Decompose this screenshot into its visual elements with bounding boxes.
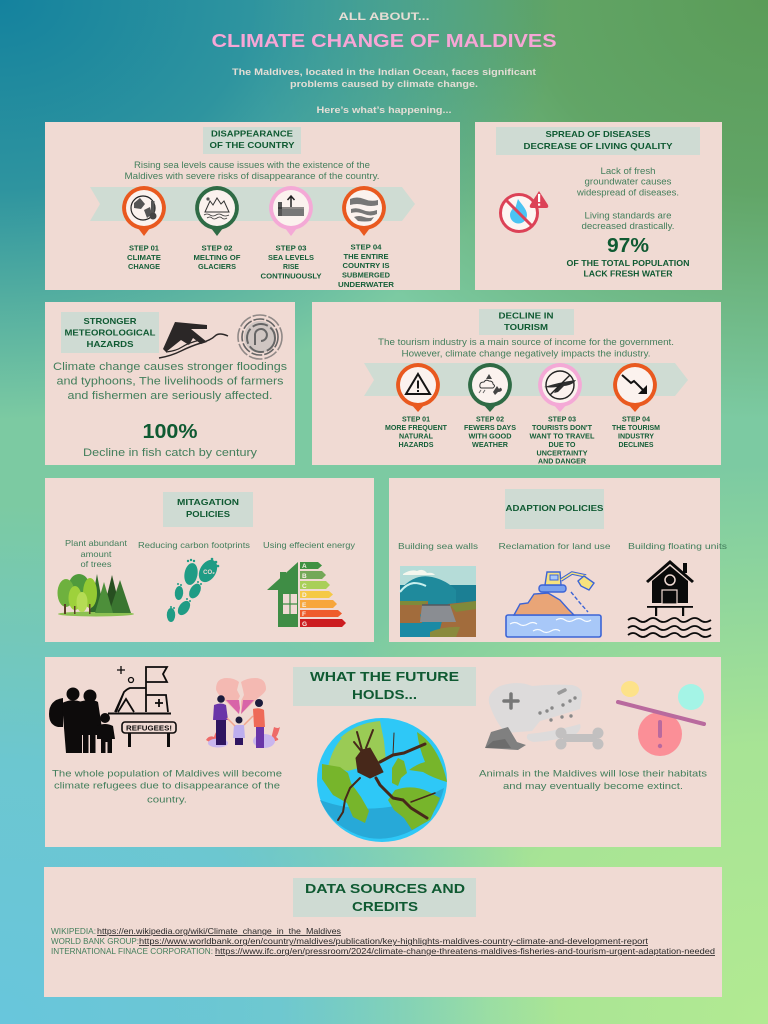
heading: mitigation <box>163 492 253 527</box>
step 04 label: UNDERWATER <box>338 282 394 289</box>
heading: tourism: TOURISM <box>504 322 548 332</box>
step 03 pin: no flights <box>538 363 582 412</box>
heading: data sources: CREDITS <box>352 899 418 914</box>
step 04 label: COUNTRY IS <box>342 263 390 270</box>
step 01 label <box>127 246 161 271</box>
heading: disappearance: OF THE COUNTRY <box>210 140 295 150</box>
arrow band <box>90 187 415 221</box>
icon: family with broken heart <box>206 678 280 748</box>
heading: hazards: STRONGER <box>84 316 136 326</box>
source line: ifc: https://www.ifc.org/en/pressroom/2024/climate-change-threatens-maldives-fisheries-and-tourism-urgent-adaptation-needed <box>215 946 715 956</box>
body text <box>124 160 380 181</box>
step 03 label: UNCERTAINTY <box>536 450 588 458</box>
heading: what the future holds: HOLDS... <box>352 687 417 702</box>
caption: carbon footprints: Reducing carbon footprints <box>138 540 250 550</box>
icon: trees <box>58 574 134 616</box>
step 01 label: MORE FREQUENT <box>385 425 448 432</box>
intro text <box>232 67 537 116</box>
stat caption <box>566 259 690 278</box>
step 04 label: THE ENTIRE <box>344 254 389 261</box>
icon: cracked globe <box>317 718 447 842</box>
heading: spread of diseases: DECREASE OF LIVING QUALITY <box>524 141 673 151</box>
step 03 label: DUE TO <box>548 442 576 449</box>
body text: Rising sea levels cause issues with the existence of the <box>134 160 370 170</box>
stat caption: LACK FRESH WATER <box>584 270 673 278</box>
body text: animals <box>479 768 707 792</box>
stat caption: OF THE TOTAL POPULATION <box>566 259 690 268</box>
body text: refugees: The whole population of Maldives will become <box>52 768 282 780</box>
body text: groundwater causes <box>584 176 672 186</box>
body text: However, climate change negatively impacts the industry. <box>402 348 650 358</box>
icon: energy rating house: B <box>302 573 307 580</box>
step 03 label: CONTINUOUSLY <box>260 274 322 280</box>
step 01 label: CLIMATE <box>127 255 161 262</box>
step 01 label <box>385 416 448 449</box>
step 02 pin: bad weather <box>468 363 512 412</box>
source line: wikipedia: WIKIPEDIA: <box>51 926 96 936</box>
icon: no water warning <box>500 191 548 232</box>
icon: carbon footprints <box>167 557 221 622</box>
step 03 label: STEP 03 <box>548 416 576 424</box>
heading: hazards <box>61 312 159 353</box>
step 01 pin: climate change <box>122 186 166 236</box>
step 04 label: STEP 04 <box>622 416 650 424</box>
body text: animals: Animals in the Maldives will lose their habitats <box>479 768 707 780</box>
step 02 label <box>194 246 241 271</box>
step 02 label <box>464 416 516 449</box>
step 03 label <box>260 246 322 280</box>
body text: widespread of diseases. <box>576 188 679 198</box>
icon: energy rating house: F <box>302 611 306 618</box>
icon: refugee camp and sign <box>108 666 176 747</box>
panel: stronger meteorological hazards <box>45 302 295 465</box>
panel: what the future holds <box>45 657 721 847</box>
step 04 label: DECLINES <box>618 442 654 449</box>
stat: 100%: 100% <box>142 421 198 443</box>
icon: energy rating house <box>267 562 346 628</box>
panel: mitigation policies <box>45 478 374 642</box>
body text: Maldives with severe risks of disappearance of the country. <box>124 171 380 181</box>
body text: animals: and may eventually become extinct. <box>503 781 683 792</box>
step 03 label: SEA LEVELS <box>268 255 314 262</box>
body text: decreased drastically. <box>582 221 674 231</box>
arrow band <box>364 363 688 396</box>
heading: mitigation: MITAGATION <box>177 497 239 507</box>
caption: efficient energy: Using effecient energy <box>263 540 356 550</box>
step 02 label: MELTING OF <box>194 255 241 262</box>
panel: adaption policies <box>389 478 727 642</box>
source line: ifc: INTERNATIONAL FINACE CORPORATION: <box>51 946 213 956</box>
step 04 label <box>338 244 394 289</box>
caption: plant trees: of trees <box>80 559 112 569</box>
body text: The tourism industry is a main source of income for the government. <box>378 337 674 347</box>
step 01 label: STEP 01 <box>402 416 430 424</box>
step 03 label <box>530 416 595 466</box>
body text <box>378 337 674 358</box>
source line: world bank: https://www.worldbank.org/en/country/maldives/publication/key-highlights-maldives-country-climate-and-development-report <box>139 936 649 946</box>
panel: disappearance of the country <box>45 122 460 290</box>
icon: refugee camp and sign: REFUGEES! <box>126 726 172 732</box>
panel: decline in tourism <box>312 302 721 466</box>
step 03 label: WANT TO TRAVEL <box>530 434 595 440</box>
body text: refugees: climate refugees due to disappearance of the <box>54 780 280 792</box>
icon: dinosaur skull <box>485 683 582 750</box>
step 03 label: RISE <box>283 264 299 271</box>
step 03 label: AND DANGER <box>538 458 586 466</box>
heading: data sources: DATA SOURCES AND <box>305 881 465 896</box>
source line: ifc <box>51 946 715 956</box>
body text <box>576 166 679 231</box>
body text: and typhoons, The livelihoods of farmers <box>56 376 284 388</box>
heading: data sources <box>293 878 476 917</box>
step 02 label: GLACIERS <box>198 264 236 271</box>
step 04 label: STEP 04 <box>350 244 382 252</box>
title: CLIMATE CHANGE OF MALDIVES <box>212 31 556 51</box>
panel: spread of diseases <box>475 122 722 290</box>
intro text: The Maldives, located in the Indian Ocean, faces significant <box>232 67 537 78</box>
heading: disappearance: DISAPPEARANCE <box>211 128 293 138</box>
step 02 label: STEP 02 <box>476 416 504 424</box>
icon: typhoon swirl <box>238 315 282 359</box>
step 01 label: HAZARDS <box>398 442 434 449</box>
panel: data sources and credits <box>44 867 722 997</box>
step 01 label: NATURAL <box>399 434 434 440</box>
step 01 label: CHANGE <box>128 264 160 271</box>
caption: plant trees: Plant abundant <box>65 538 128 548</box>
caption: plant trees: amount <box>80 549 112 559</box>
heading: disappearance <box>203 127 301 154</box>
icon: refugee family <box>49 688 115 753</box>
source line: world bank: WORLD BANK GROUP: <box>51 936 139 946</box>
stat caption: Decline in fish catch by century <box>83 447 258 459</box>
heading: hazards: HAZARDS <box>86 339 134 349</box>
step 01 pin: hazard warning <box>396 363 440 412</box>
intro text: problems caused by climate change. <box>290 79 478 90</box>
heading: tourism <box>479 309 574 335</box>
icon: sea wall scene <box>400 566 476 637</box>
step 03 pin: sea levels rise <box>269 186 313 236</box>
body text: Living standards are <box>584 210 672 220</box>
step 04 pin: declining arrow <box>613 363 657 412</box>
step 04 label: INDUSTRY <box>618 434 654 440</box>
step 04 label <box>612 416 660 449</box>
heading: spread of diseases <box>496 127 700 155</box>
step 04 pin: submerged <box>342 186 386 236</box>
heading: spread of diseases: SPREAD OF DISEASES <box>546 129 651 139</box>
step 01 label: STEP 01 <box>129 246 159 252</box>
header: all about kicker: ALL ABOUT... <box>338 11 430 23</box>
heading: adaption: ADAPTION POLICIES <box>506 503 604 513</box>
icon: energy rating house: A <box>302 563 307 570</box>
icon: floating house <box>628 560 711 637</box>
caption: floating units: Building floating units <box>628 541 727 551</box>
step 02 label: FEWERS DAYS <box>464 425 516 432</box>
intro text: Here’s what’s happening... <box>316 105 452 116</box>
body text: refugees <box>52 768 282 806</box>
heading: tourism: DECLINE IN <box>498 310 554 320</box>
icon: energy rating house: E <box>302 602 307 609</box>
source line: wikipedia: https://en.wikipedia.org/wiki/Climate_change_in_the_Maldives <box>97 926 341 936</box>
icon: flooded house <box>159 322 228 358</box>
body text: refugees: country. <box>147 794 187 806</box>
body text: Lack of fresh <box>600 166 656 176</box>
step 04 label: SUBMERGED <box>342 272 390 280</box>
step 04 label: THE TOURISM <box>612 425 660 432</box>
step 03 label: TOURISTS DON'T <box>532 425 593 432</box>
icon: imbalance warning <box>618 681 704 756</box>
icon: energy rating house: G <box>302 621 307 628</box>
stat: 97%: 97% <box>607 235 649 257</box>
body text: Climate change causes stronger floodings <box>53 361 288 373</box>
icon: bone <box>556 728 604 750</box>
icon: energy rating house: C <box>302 583 307 590</box>
icon: carbon footprints: CO₂ <box>203 570 215 576</box>
heading: hazards: METEOROLOGICAL <box>64 328 156 338</box>
step 02 pin: melting glaciers <box>195 186 239 236</box>
heading: what the future holds <box>293 667 476 706</box>
caption: land reclamation: Reclamation for land use <box>498 541 611 551</box>
step 02 label: WEATHER <box>472 442 508 449</box>
body text: and fishermen are seriously affected. <box>68 390 272 402</box>
heading: adaption <box>505 489 604 529</box>
caption: sea walls: Building sea walls <box>398 541 478 551</box>
icon: energy rating house: D <box>302 592 307 599</box>
body text <box>53 361 288 402</box>
step 03 label: STEP 03 <box>276 246 307 252</box>
step 02 label: WITH GOOD <box>468 434 512 440</box>
icon: land reclamation excavator <box>506 572 601 637</box>
heading: mitigation: POLICIES <box>186 509 230 519</box>
step 02 label: STEP 02 <box>202 246 233 252</box>
caption: plant trees <box>65 538 128 569</box>
heading: what the future holds: WHAT THE FUTURE <box>310 669 459 684</box>
